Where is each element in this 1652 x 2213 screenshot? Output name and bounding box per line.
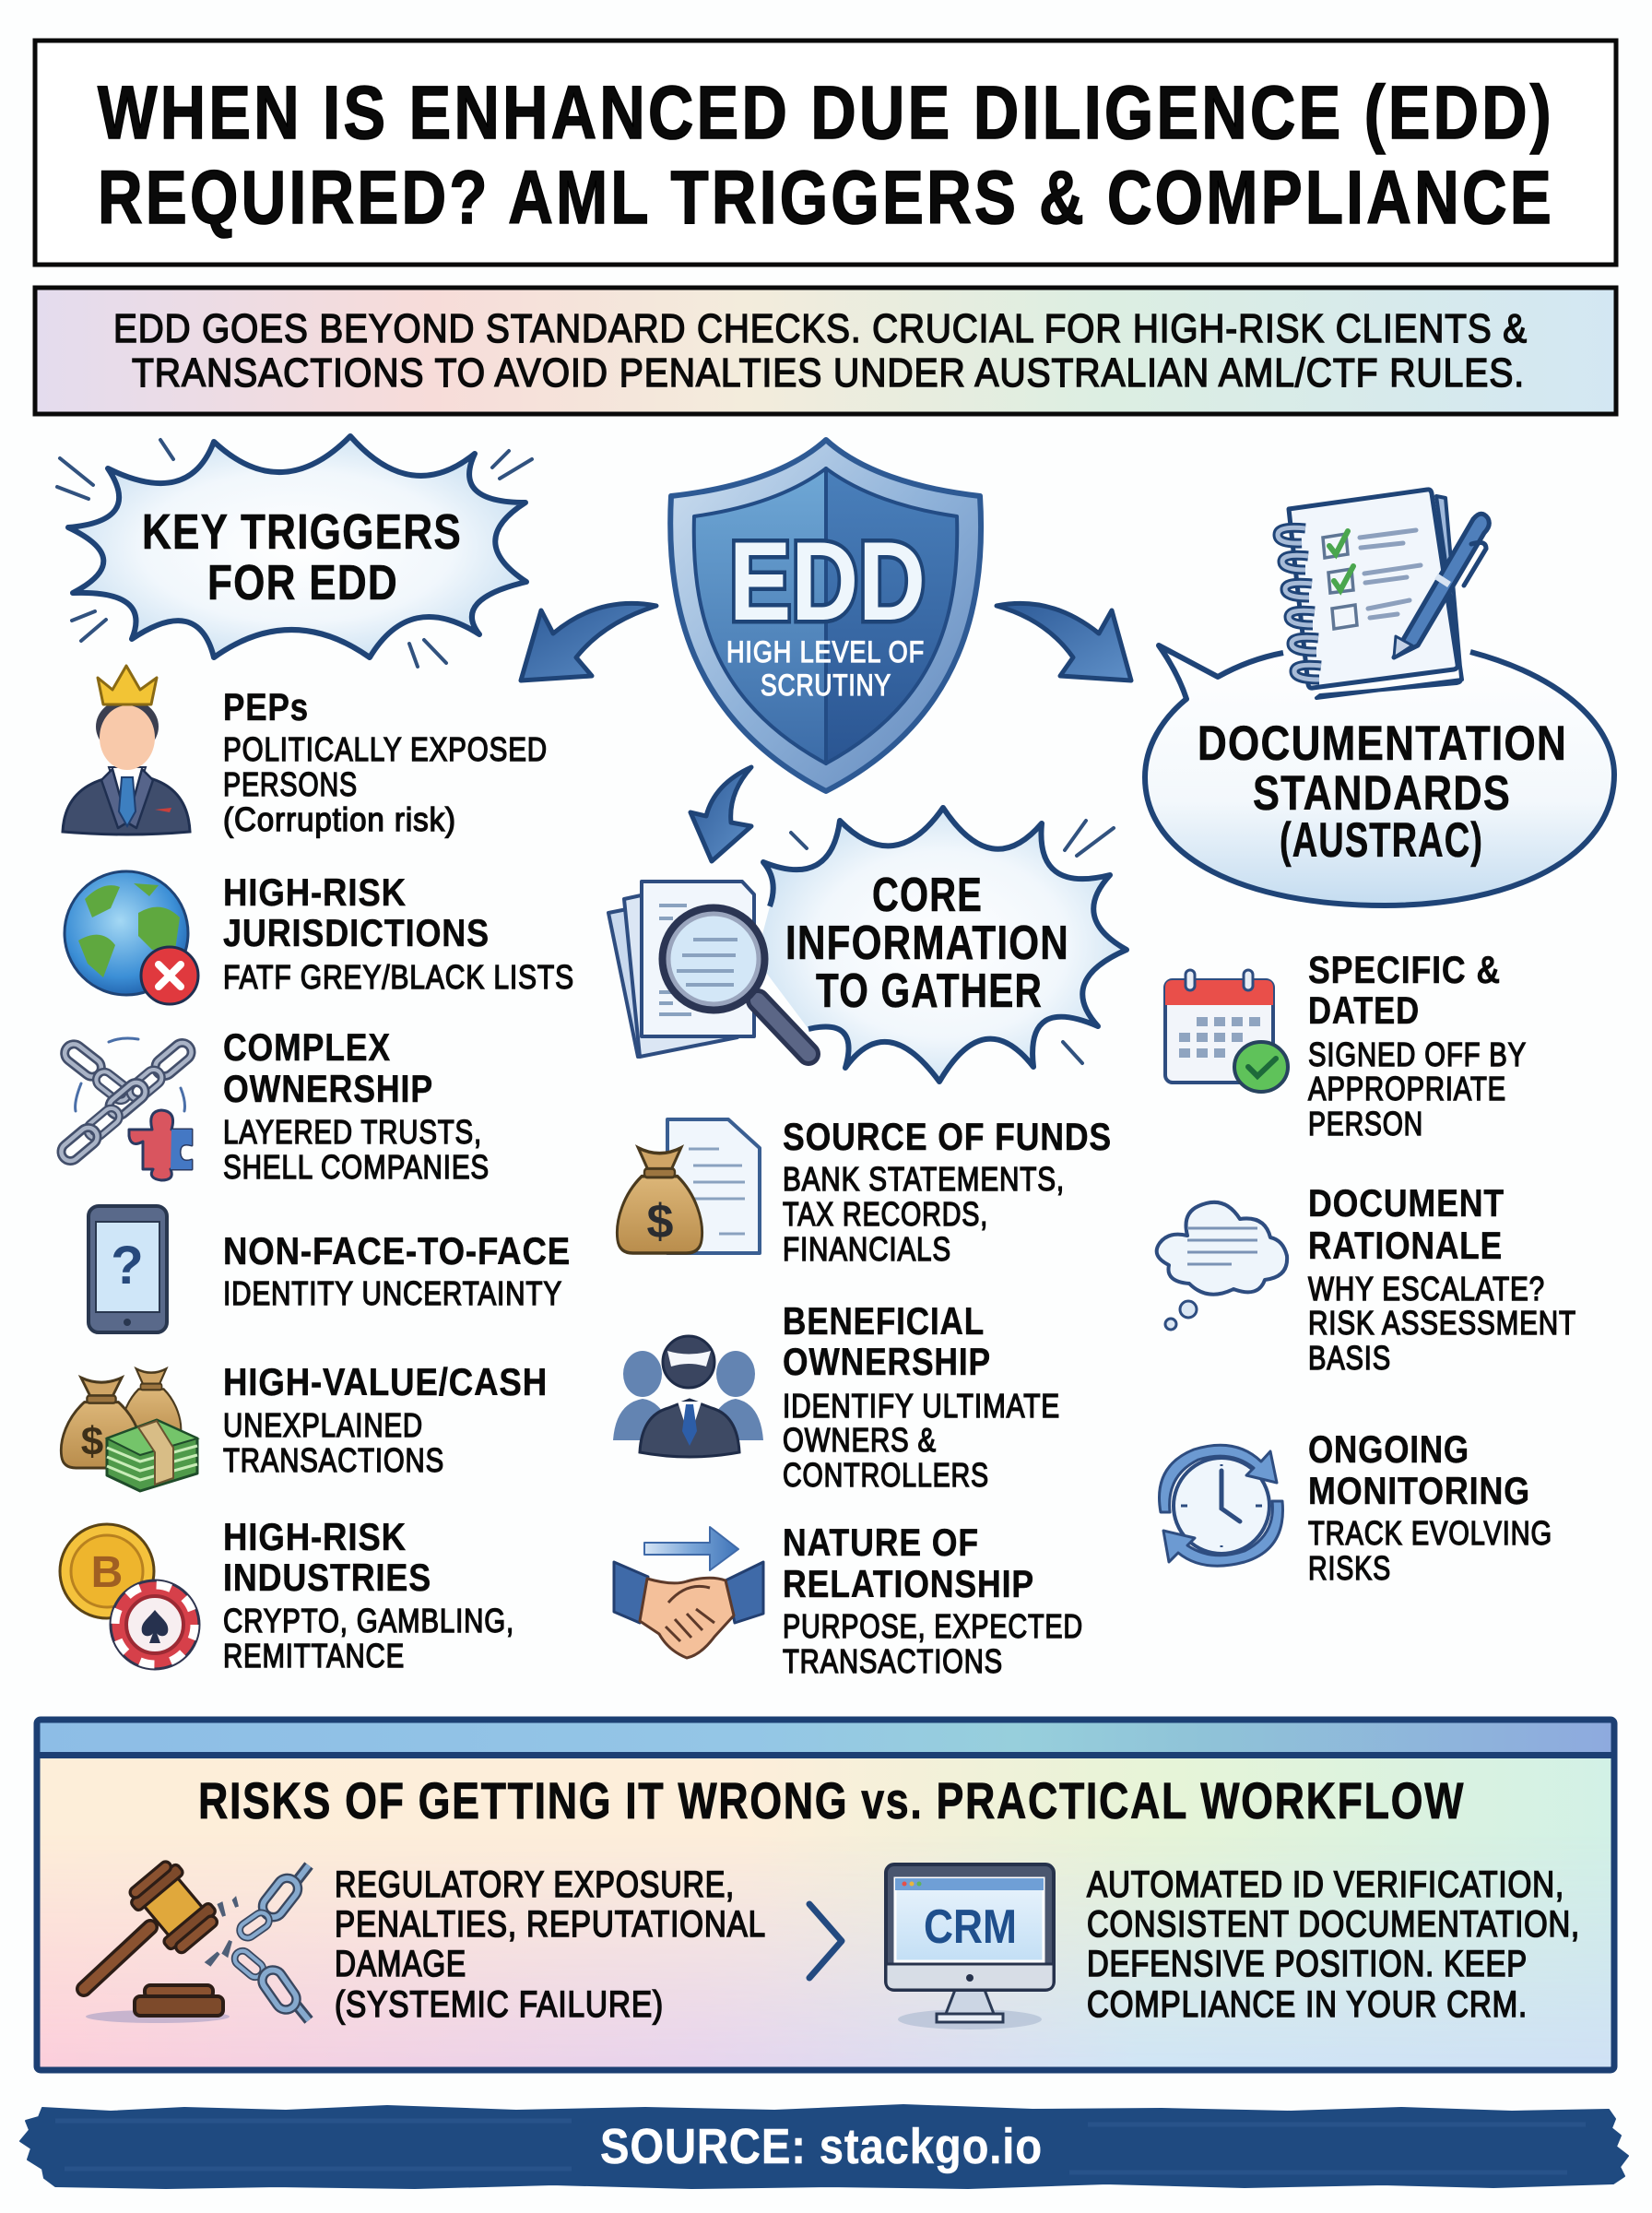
text: non-face-to-face bbox=[223, 1229, 571, 1312]
text: ongoing monitoring: TRACK EVOLVING bbox=[1308, 1514, 1552, 1552]
icon: thought cloud bbox=[1157, 1202, 1287, 1330]
text: high-risk industries: HIGH-RISK bbox=[223, 1515, 407, 1558]
text: nature of relationship bbox=[783, 1521, 1083, 1680]
text: PEPs: POLITICALLY EXPOSED bbox=[223, 730, 548, 768]
text: beneficial ownership: OWNERSHIP bbox=[783, 1340, 991, 1383]
arrow: to documentation bbox=[997, 603, 1131, 680]
text: non-face-to-face: IDENTITY UNCERTAINTY bbox=[223, 1274, 562, 1312]
text: document rationale: BASIS bbox=[1308, 1339, 1391, 1377]
shield: EDD: SCRUTINY bbox=[761, 669, 891, 702]
text: high-risk jurisdictions: HIGH-RISK bbox=[223, 870, 407, 914]
text: risks bbox=[335, 1864, 766, 2025]
text: PEPs bbox=[223, 685, 548, 838]
text: beneficial ownership bbox=[783, 1299, 1060, 1494]
text: high-risk jurisdictions: FATF GREY/BLACK LISTS bbox=[223, 958, 574, 996]
icon: money bags and banknotes: $ bbox=[81, 1419, 103, 1464]
shield: EDD: EDD bbox=[729, 518, 926, 644]
item: beneficial ownership bbox=[613, 1299, 1060, 1494]
text: workflow bbox=[1087, 1864, 1580, 2025]
text: high-risk industries: CRYPTO, GAMBLING, bbox=[223, 1602, 514, 1639]
icon: CRM monitor: CRM bbox=[924, 1900, 1017, 1954]
text: high-risk industries: INDUSTRIES bbox=[223, 1556, 431, 1599]
text: source of funds: FINANCIALS bbox=[783, 1230, 951, 1268]
text: specific and dated: APPROPRIATE bbox=[1308, 1070, 1506, 1107]
panel: core information column bbox=[608, 808, 1127, 1680]
intro banner: TRANSACTIONS TO AVOID PENALTIES UNDER AUSTRALIAN AML/CTF RULES. bbox=[132, 350, 1525, 396]
heading burst: core information: CORE bbox=[872, 869, 983, 922]
text: source of funds: BANK STATEMENTS, bbox=[783, 1160, 1065, 1198]
heading bubble: documentation standards bbox=[1145, 645, 1614, 905]
arrow: to key triggers bbox=[521, 603, 656, 680]
text: complex ownership: OWNERSHIP bbox=[223, 1067, 433, 1110]
intro banner bbox=[35, 288, 1616, 414]
trigger: high-risk jurisdictions bbox=[65, 870, 574, 1004]
text: PEPs: (Corruption risk) bbox=[223, 800, 456, 838]
text: document rationale: RATIONALE bbox=[1308, 1224, 1503, 1267]
text: document rationale: RISK ASSESSMENT bbox=[1308, 1304, 1576, 1342]
trigger: PEPs bbox=[63, 666, 548, 838]
heading burst: key triggers: KEY TRIGGERS bbox=[142, 504, 462, 560]
trigger: high-value cash bbox=[61, 1360, 548, 1491]
icon: calendar with check bbox=[1165, 970, 1288, 1092]
text: complex ownership: SHELL COMPANIES bbox=[223, 1148, 490, 1186]
text: source of funds: TAX RECORDS, bbox=[783, 1195, 988, 1233]
heading bubble: documentation standards: DOCUMENTATION bbox=[1198, 716, 1567, 771]
text: workflow: DEFENSIVE POSITION. KEEP bbox=[1087, 1944, 1528, 1984]
text: high-value cash bbox=[223, 1360, 548, 1479]
text: specific and dated: SPECIFIC & bbox=[1308, 948, 1501, 991]
text: source of funds: SOURCE OF FUNDS bbox=[783, 1115, 1112, 1158]
icon: bitcoin and casino chip bbox=[60, 1524, 199, 1669]
text: workflow: AUTOMATED ID VERIFICATION, bbox=[1087, 1864, 1564, 1905]
text: beneficial ownership: CONTROLLERS bbox=[783, 1456, 989, 1494]
text: risks: (SYSTEMIC FAILURE) bbox=[335, 1984, 664, 2025]
arrow: chevron bbox=[809, 1904, 842, 1978]
text: high-value cash: HIGH-VALUE/CASH bbox=[223, 1360, 548, 1403]
text: high-risk jurisdictions bbox=[223, 870, 574, 996]
text: non-face-to-face: NON-FACE-TO-FACE bbox=[223, 1229, 571, 1272]
icon: money bags and banknotes bbox=[61, 1368, 197, 1491]
icon: globe with red x bbox=[65, 871, 198, 1004]
shield: EDD: HIGH LEVEL OF bbox=[726, 635, 925, 669]
text: high-risk industries: REMITTANCE bbox=[223, 1637, 405, 1675]
text: beneficial ownership: OWNERS & bbox=[783, 1421, 937, 1459]
trigger: high-risk industries bbox=[60, 1515, 514, 1675]
icon: gavel and broken chain bbox=[84, 1856, 309, 2023]
shield: EDD bbox=[670, 440, 981, 791]
heading bubble: documentation standards: (AUSTRAC) bbox=[1280, 813, 1483, 868]
item: document rationale bbox=[1157, 1181, 1576, 1377]
text: source of funds bbox=[783, 1115, 1112, 1268]
icon: bitcoin and casino chip: B bbox=[91, 1548, 123, 1597]
text: specific and dated: SIGNED OFF BY bbox=[1308, 1035, 1527, 1073]
icon: masked figure bbox=[613, 1336, 763, 1457]
text: complex ownership: COMPLEX bbox=[223, 1025, 391, 1069]
text: complex ownership bbox=[223, 1025, 490, 1186]
trigger: complex ownership bbox=[57, 1025, 490, 1186]
panel: key triggers column bbox=[57, 436, 574, 1675]
heading burst: core information bbox=[756, 808, 1127, 1082]
text: specific and dated: DATED bbox=[1308, 988, 1420, 1032]
text: nature of relationship: RELATIONSHIP bbox=[783, 1562, 1034, 1605]
text: PEPs: PERSONS bbox=[223, 765, 358, 803]
text: document rationale: WHY ESCALATE? bbox=[1308, 1270, 1545, 1308]
icon: clock with cycle arrows bbox=[1160, 1445, 1282, 1566]
panel: risks vs workflow bbox=[34, 1720, 1617, 2070]
heading burst: core information: TO GATHER bbox=[816, 964, 1043, 1018]
heading burst: core information: INFORMATION bbox=[785, 917, 1069, 970]
text: high-risk jurisdictions: JURISDICTIONS bbox=[223, 911, 490, 954]
source band: SOURCE: stackgo.io bbox=[600, 2119, 1043, 2174]
text: document rationale: DOCUMENT bbox=[1308, 1181, 1504, 1225]
trigger: non-face-to-face bbox=[88, 1206, 571, 1332]
text: nature of relationship: PURPOSE, EXPECTED bbox=[783, 1607, 1083, 1645]
text: specific and dated: PERSON bbox=[1308, 1105, 1423, 1142]
text: high-value cash: TRANSACTIONS bbox=[223, 1441, 444, 1479]
icon: handshake with arrow bbox=[614, 1527, 763, 1658]
icon: tablet with question mark bbox=[88, 1206, 167, 1332]
text: beneficial ownership: BENEFICIAL bbox=[783, 1299, 985, 1343]
icon: crowned person bbox=[63, 666, 190, 834]
item: source of funds bbox=[617, 1115, 1112, 1268]
title bbox=[35, 41, 1616, 265]
text: ongoing monitoring: RISKS bbox=[1308, 1549, 1391, 1587]
item: ongoing monitoring bbox=[1160, 1427, 1552, 1587]
text: nature of relationship: TRANSACTIONS bbox=[783, 1642, 1003, 1680]
heading burst: key triggers bbox=[57, 436, 532, 667]
text: document rationale bbox=[1308, 1181, 1576, 1377]
icon: documents and magnifier bbox=[608, 882, 808, 1057]
text: complex ownership: LAYERED TRUSTS, bbox=[223, 1113, 482, 1151]
icon: tablet with question mark: ? bbox=[111, 1236, 144, 1296]
icon: money bag with document: $ bbox=[647, 1195, 674, 1249]
text: ongoing monitoring: MONITORING bbox=[1308, 1469, 1530, 1512]
text: risks: PENALTIES, REPUTATIONAL bbox=[335, 1904, 766, 1945]
panel: documentation standards column bbox=[1145, 490, 1614, 1587]
text: workflow: COMPLIANCE IN YOUR CRM. bbox=[1087, 1984, 1528, 2025]
text: PEPs: PEPs bbox=[223, 685, 309, 728]
text: risks: DAMAGE bbox=[335, 1944, 466, 1984]
text: ongoing monitoring bbox=[1308, 1427, 1552, 1587]
text: nature of relationship: NATURE OF bbox=[783, 1521, 979, 1564]
item: specific and dated bbox=[1165, 948, 1527, 1142]
icon: checklist notebook and pen bbox=[1278, 490, 1489, 698]
text: high-value cash: UNEXPLAINED bbox=[223, 1406, 423, 1444]
heading bubble: documentation standards: STANDARDS bbox=[1253, 766, 1511, 821]
heading burst: key triggers: FOR EDD bbox=[207, 555, 398, 610]
text: risks: REGULATORY EXPOSURE, bbox=[335, 1864, 735, 1905]
text: beneficial ownership: IDENTIFY ULTIMATE bbox=[783, 1387, 1060, 1425]
text: specific and dated bbox=[1308, 948, 1527, 1142]
text: ongoing monitoring: ONGOING bbox=[1308, 1427, 1469, 1471]
text: high-risk industries bbox=[223, 1515, 514, 1675]
item: nature of relationship bbox=[614, 1521, 1083, 1680]
icon: CRM monitor bbox=[886, 1864, 1054, 2030]
source band bbox=[20, 2105, 1628, 2188]
icon: money bag with document bbox=[617, 1119, 760, 1253]
icon: chain and puzzle piece bbox=[57, 1038, 195, 1180]
arrow: to core information bbox=[690, 767, 751, 861]
